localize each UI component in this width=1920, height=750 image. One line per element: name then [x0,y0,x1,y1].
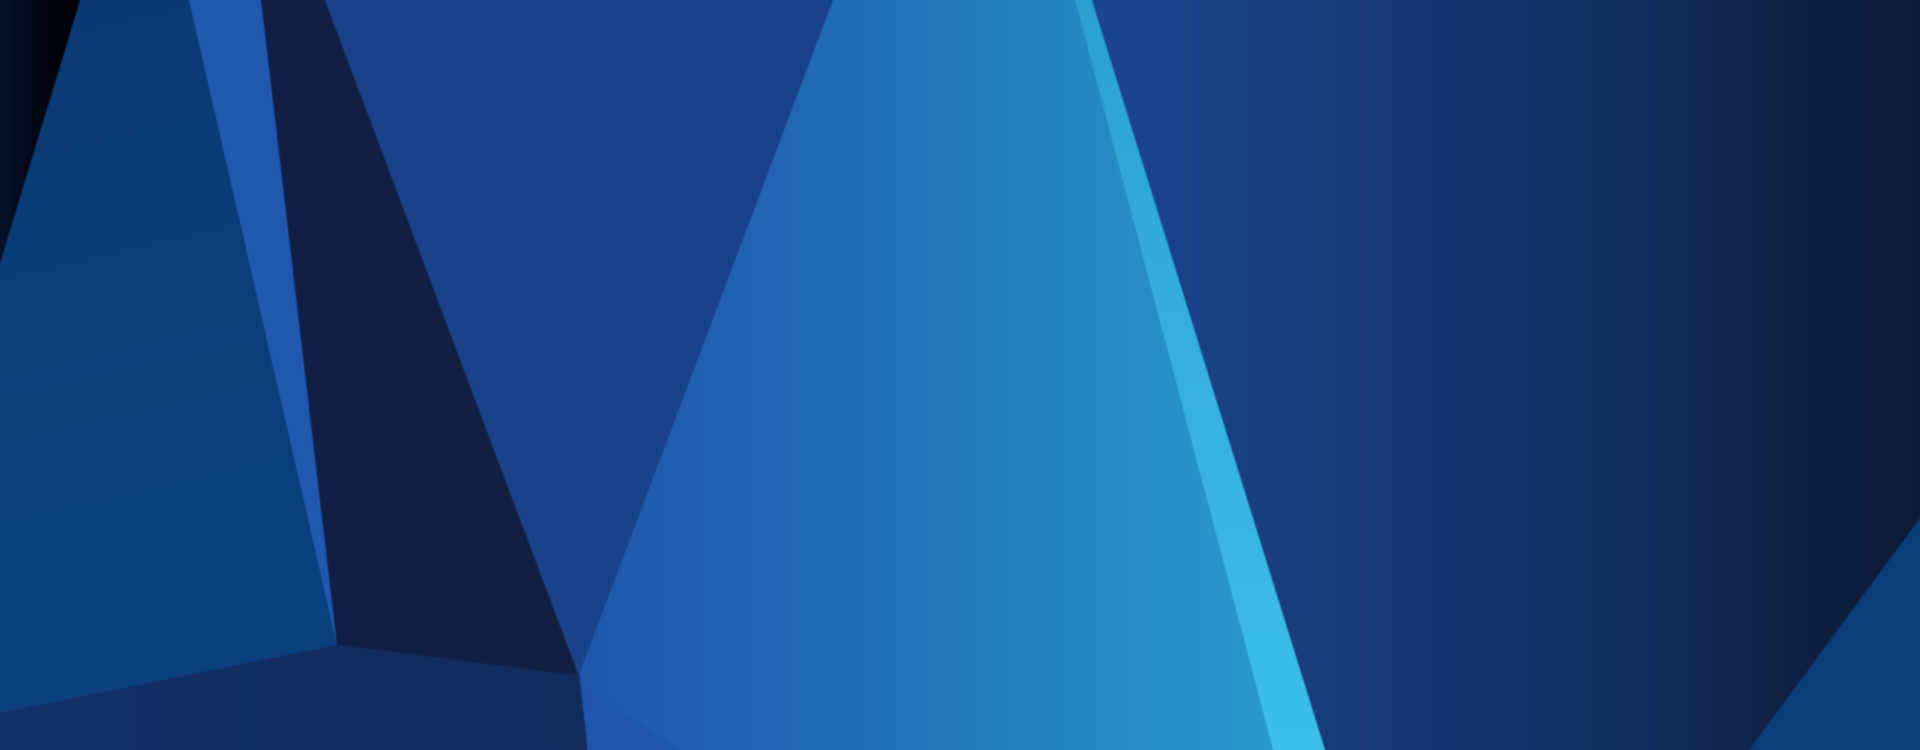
large light blue facet [580,0,1275,750]
bright blue stripe [188,0,337,645]
bottom-right blue triangle [1745,510,1920,750]
cyan stripe [1073,0,1327,750]
dark navy facet [260,0,579,676]
top-left black wedge [0,0,84,284]
bottom accent facet [582,686,690,750]
bottom navy floor facet [0,645,589,750]
left blue facet [0,0,337,714]
middle blue facet [323,0,835,674]
